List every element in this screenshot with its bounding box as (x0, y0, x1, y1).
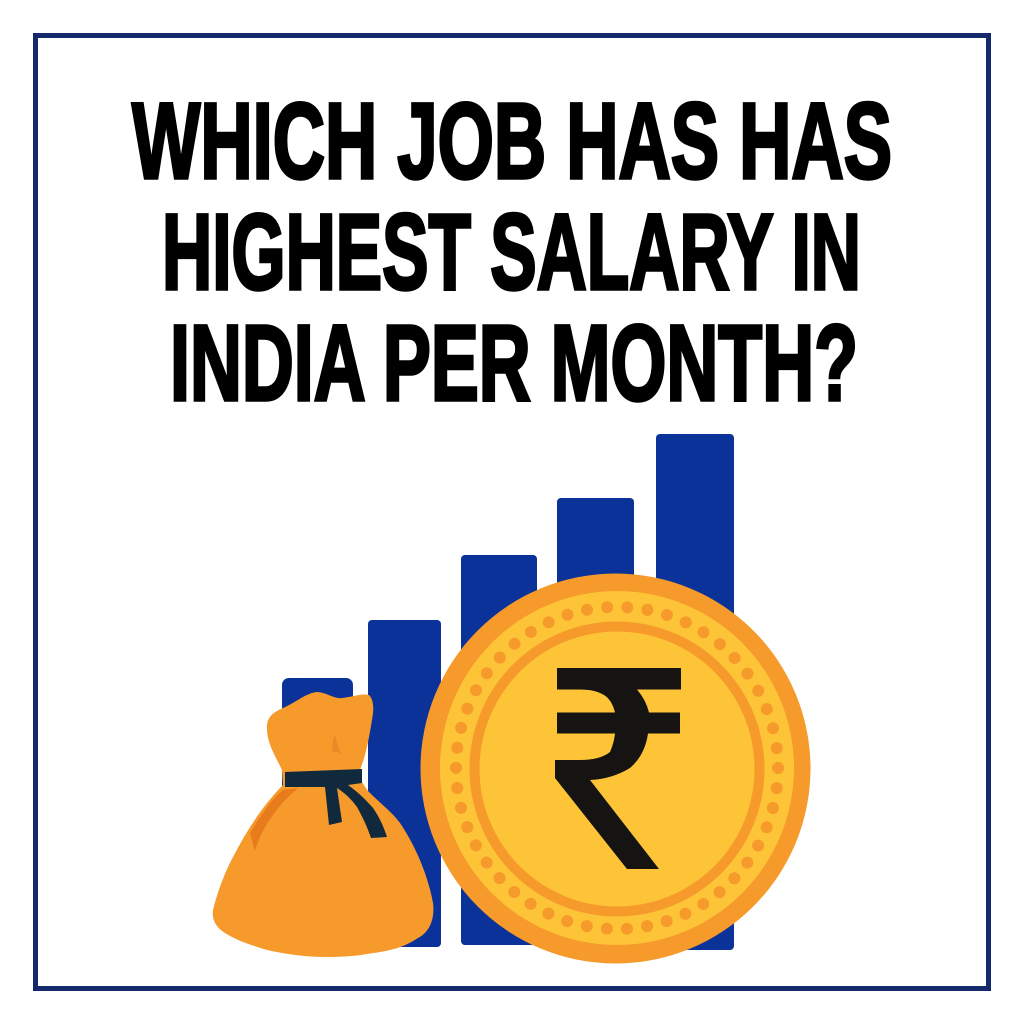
bag highlight (250, 788, 298, 851)
rupee symbol (555, 668, 681, 869)
icon: rupee coin (420, 574, 810, 964)
bag tie (285, 769, 387, 838)
coin dots (456, 607, 778, 929)
icon: money bag (213, 692, 433, 957)
bar chart (282, 434, 734, 950)
coin rim (440, 591, 794, 945)
bag crease (332, 735, 341, 754)
title (132, 80, 892, 423)
coin inner ring (474, 626, 760, 912)
